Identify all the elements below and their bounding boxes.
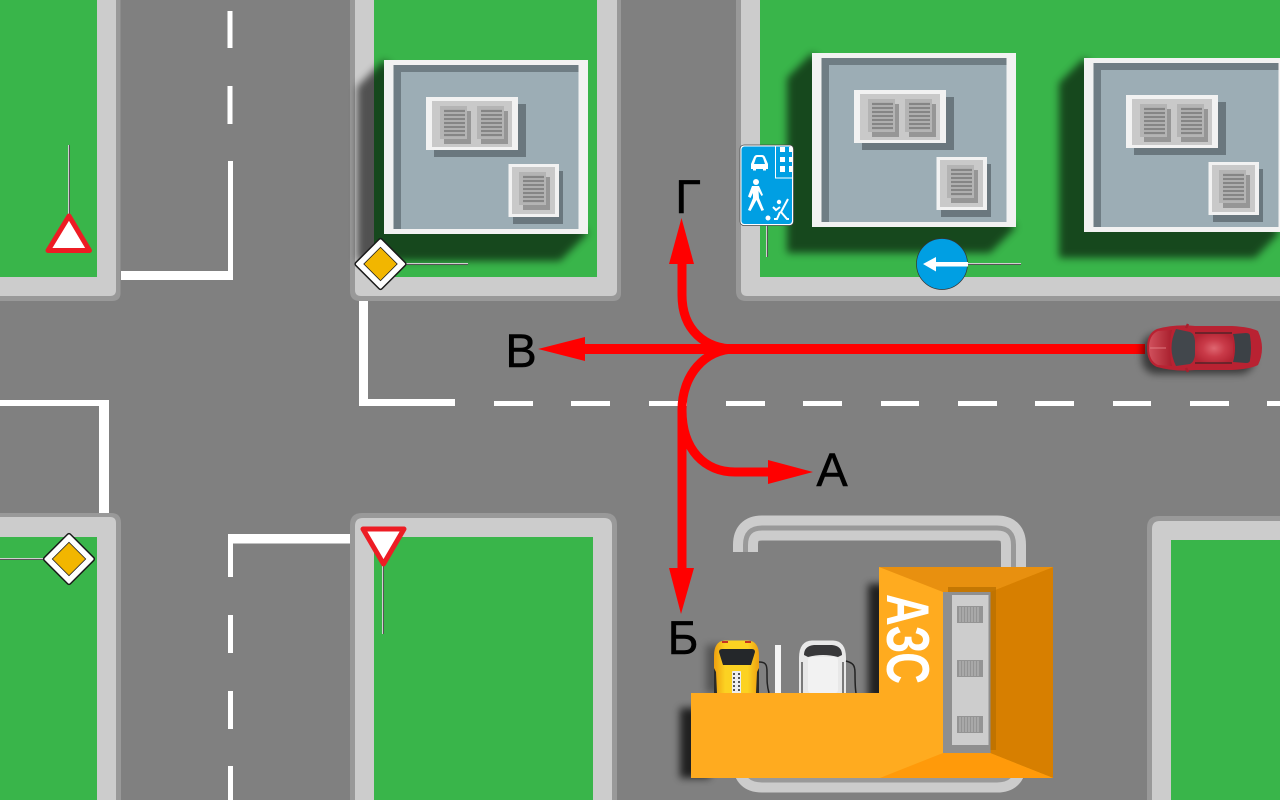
route to Г: [682, 262, 735, 349]
pump island: [775, 645, 781, 694]
route to А: [682, 410, 770, 472]
station name: АЗС: [874, 594, 941, 684]
block: top-right lawn: [736, 0, 1280, 301]
block: bottom-centre lawn: [350, 513, 617, 800]
route to В: [580, 344, 1145, 354]
route letters: Г: [675, 170, 701, 223]
sign: priority road, centre: [354, 238, 468, 290]
lower vertical dashes: [228, 615, 233, 800]
building: right: [1084, 58, 1280, 232]
rear window: [1233, 333, 1251, 363]
car body: [1147, 325, 1262, 371]
centre stop line: [359, 301, 455, 406]
building shadow: right: [1059, 58, 1280, 258]
station shadow: [680, 584, 898, 778]
mirrors: [1186, 324, 1188, 372]
block: top-centre lawn: [350, 0, 621, 301]
block: bottom-left lawn: [0, 513, 121, 800]
building: middle: [812, 53, 1016, 227]
sign: one-way left: [916, 238, 1021, 290]
route arrows: [538, 218, 1145, 614]
route letters: В: [505, 324, 537, 377]
sign: priority road, lower left: [0, 533, 95, 585]
building shadow: centre: [357, 60, 588, 261]
horizontal dashes: [494, 401, 1280, 406]
station roof: [691, 567, 1053, 778]
car shadow: [1142, 334, 1254, 374]
roof unit: [943, 592, 990, 753]
car: taxi at pump: [706, 640, 769, 693]
gas station building: [691, 567, 1053, 778]
top-left vertical dashes: [228, 11, 232, 124]
block: top-left lawn: [0, 0, 120, 301]
sign: give way, lower: [363, 529, 404, 634]
lower stop line: [228, 534, 350, 577]
sign: residential zone: [740, 145, 794, 257]
route letters: Б: [668, 611, 698, 664]
route to Б: [682, 349, 735, 570]
route letters: А: [816, 443, 848, 496]
taxi shadow: [706, 645, 726, 693]
car: red: [1142, 324, 1262, 374]
sign: give way, top-left: [48, 145, 90, 250]
roof: [1195, 334, 1233, 362]
windshield: [1172, 329, 1195, 366]
houses: [357, 53, 1280, 261]
white car body: [799, 640, 846, 693]
taxi body: [714, 640, 759, 693]
car: white at pump: [799, 640, 856, 693]
building shadow: middle: [787, 53, 1016, 253]
top-left stop line: [121, 161, 233, 280]
building: centre: [384, 60, 588, 234]
route letters: [505, 170, 848, 664]
left stop line: [0, 400, 109, 513]
block: bottom-right lawn: [1147, 516, 1280, 800]
gas station forecourt loop: [746, 528, 1014, 780]
